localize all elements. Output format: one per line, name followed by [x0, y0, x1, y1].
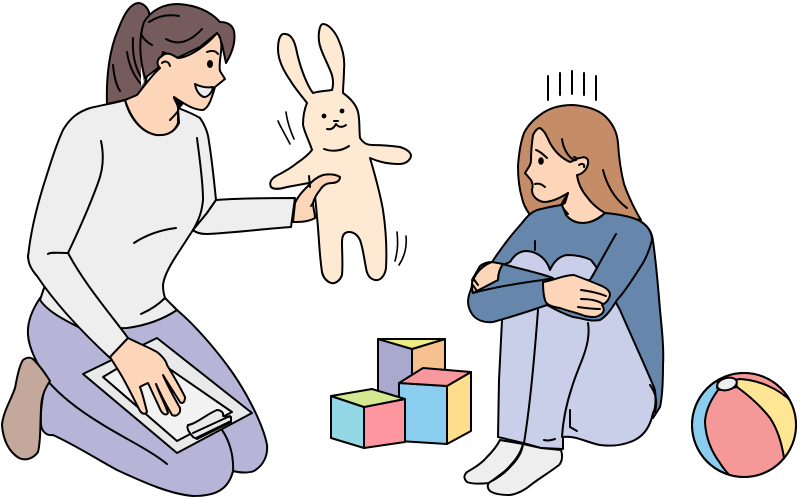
woman hand on clipboard	[110, 338, 185, 416]
rabbit toy	[270, 24, 411, 283]
rabbit face	[322, 109, 349, 151]
ball top pink panel	[716, 374, 789, 400]
front left block	[331, 389, 405, 448]
woman ponytail	[107, 3, 150, 104]
girl trousers	[498, 251, 656, 449]
girl sweater front	[468, 205, 652, 322]
ball pink panel	[705, 387, 784, 480]
girl frown	[535, 184, 545, 187]
girl socks	[464, 440, 562, 495]
woman smile	[195, 84, 213, 97]
worry lines above head	[548, 71, 596, 100]
ball cap	[716, 376, 738, 392]
ball base	[692, 373, 796, 477]
back block	[378, 339, 445, 405]
girl left arm overlap	[473, 264, 553, 293]
girl hair	[518, 105, 641, 220]
girl face and neck	[525, 128, 627, 223]
girl hand right	[543, 275, 610, 317]
woman raised forearm	[193, 198, 295, 234]
woman trousers	[28, 298, 267, 496]
woman face and neck	[125, 33, 225, 135]
clipboard	[83, 338, 252, 453]
girl figure	[464, 71, 663, 495]
beach ball	[692, 365, 800, 480]
woman eye	[207, 60, 213, 68]
motion lines left	[278, 112, 294, 144]
front right block	[399, 368, 471, 444]
woman clipboard arm	[28, 253, 128, 358]
woman hair	[140, 4, 235, 86]
rabbit body and ears	[270, 24, 411, 283]
woman foot	[2, 358, 50, 459]
motion lines right	[395, 232, 406, 265]
woman figure	[2, 3, 295, 496]
ball yellow panel	[736, 380, 795, 456]
girl hand left	[472, 262, 503, 293]
ball outline	[692, 373, 796, 477]
girl sweater back	[560, 213, 663, 418]
girl eye	[538, 157, 544, 165]
woman sweater	[28, 100, 216, 329]
building blocks	[331, 339, 471, 448]
woman hand holding rabbit	[293, 174, 340, 222]
gap behind neck	[141, 66, 144, 86]
